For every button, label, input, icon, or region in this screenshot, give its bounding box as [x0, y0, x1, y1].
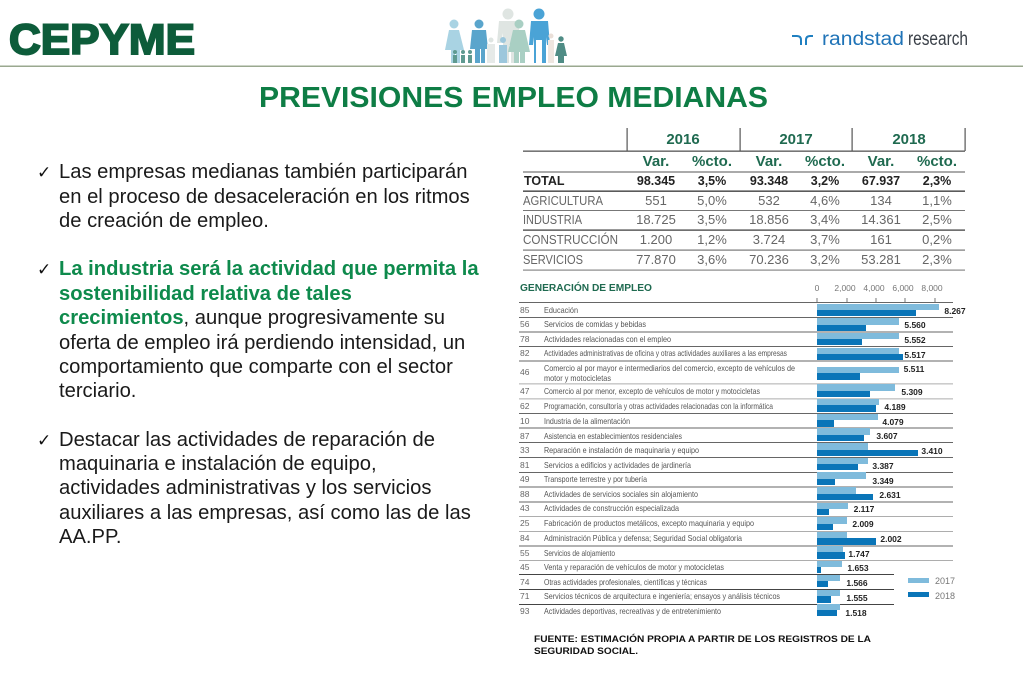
chart row codes: 81 [520, 460, 530, 470]
chart row labels: Fabricación de productos metálicos, excepto maquinaria y equipo [544, 518, 754, 528]
chart axis: 2,000 [834, 283, 856, 293]
table: forecasts 2016-2018: 98.345 [637, 174, 675, 188]
bullet 3: maquinaria e instalación de equipo, [59, 453, 377, 475]
chart row codes: 85 [520, 305, 530, 315]
logo: CEPYME: CEPYME [9, 16, 195, 64]
table: forecasts 2016-2018: %cto. [692, 153, 732, 170]
chart row labels [544, 305, 795, 616]
chart row codes: 78 [520, 334, 530, 344]
table: forecasts 2016-2018: Var. [756, 153, 782, 170]
table: forecasts 2016-2018: 14.361 [861, 212, 901, 227]
bullet 1: ✓ [37, 163, 51, 183]
table: forecasts 2016-2018: 70.236 [749, 252, 789, 267]
chart values [845, 306, 966, 618]
bullet 3: auxiliares a las empresas, así como las de las [59, 502, 471, 524]
table: forecasts 2016-2018: 3,4% [810, 212, 840, 227]
table: forecasts 2016-2018: 53.281 [861, 252, 901, 267]
icon: group of people [445, 8, 567, 63]
chart row codes: 43 [520, 503, 530, 513]
table: forecasts 2016-2018: 3,2% [810, 252, 840, 267]
chart row codes: 49 [520, 474, 530, 484]
chart row codes: 47 [520, 386, 530, 396]
chart row labels: Actividades administrativas de oficina y otras actividades auxiliares a las empresas [544, 348, 787, 358]
chart row codes: 33 [520, 445, 530, 455]
bars 2017 [817, 304, 939, 610]
bullet 1: en el proceso de desaceleración en los ritmos [59, 186, 470, 208]
chart row codes: 84 [520, 533, 530, 543]
logo: randstad research: research [908, 29, 968, 50]
table: forecasts 2016-2018: TOTAL [524, 174, 565, 188]
bullet 1: de creación de empleo. [59, 210, 269, 232]
chart row labels: Comercio al por mayor e intermediarios del comercio, excepto de vehículos de [544, 363, 795, 373]
chart values: 1.653 [847, 563, 869, 573]
chart row labels: motor y motocicletas [544, 373, 611, 383]
chart row labels: Servicios de comidas y bebidas [544, 319, 646, 329]
table: forecasts 2016-2018: INDUSTRIA [523, 212, 582, 227]
table: forecasts 2016-2018: 3,5% [698, 174, 726, 188]
bars 2018 [817, 310, 918, 616]
table: forecasts 2016-2018: 3,6% [697, 252, 727, 267]
table: forecasts 2016-2018: 4,6% [810, 193, 840, 208]
table: forecasts 2016-2018: SERVICIOS [523, 252, 583, 267]
chart row codes: 46 [520, 367, 530, 377]
chart axis [815, 283, 943, 302]
chart values: 5.309 [901, 387, 923, 397]
table: forecasts 2016-2018: 2,3% [923, 174, 951, 188]
chart values: 5.511 [904, 364, 925, 374]
chart values: 3.349 [872, 476, 894, 486]
table: forecasts 2016-2018: %cto. [917, 153, 957, 170]
source note: FUENTE: ESTIMACIÓN PROPIA A PARTIR DE LOS REGISTROS DE LA [534, 633, 871, 645]
chart row labels: Actividades deportivas, recreativas y de entretenimiento [544, 606, 721, 616]
chart row codes [520, 305, 530, 616]
table: forecasts 2016-2018: 0,2% [922, 232, 952, 247]
chart axis: 4,000 [863, 283, 885, 293]
table: forecasts 2016-2018 [523, 128, 966, 271]
source note: SEGURIDAD SOCIAL. [534, 646, 638, 657]
table: forecasts 2016-2018: 18.856 [749, 212, 789, 227]
chart row codes: 87 [520, 431, 530, 441]
bullet 3: ✓ [37, 431, 51, 451]
title: PREVISIONES EMPLEO MEDIANAS [259, 82, 768, 114]
chart row labels: Servicios técnicos de arquitectura e ingeniería; ensayos y análisis técnicos [544, 591, 780, 601]
chart values: 1.747 [848, 549, 870, 559]
table: forecasts 2016-2018: 1,2% [697, 232, 727, 247]
table: forecasts 2016-2018: CONSTRUCCIÓN [523, 232, 618, 247]
logo: randstad research: randstad [822, 29, 904, 50]
chart row codes: 74 [520, 577, 530, 587]
chart row labels: Industria de la alimentación [544, 416, 630, 426]
table: forecasts 2016-2018: 2018 [892, 131, 926, 148]
table: forecasts 2016-2018: 1,1% [922, 193, 952, 208]
bullet 1: Las empresas medianas también participarán [59, 161, 467, 183]
chart row codes: 25 [520, 518, 530, 528]
chart row codes: 10 [520, 416, 530, 426]
table: forecasts 2016-2018: 93.348 [750, 174, 788, 188]
chart values: 4.079 [882, 417, 904, 427]
chart axis: 6,000 [892, 283, 914, 293]
table: forecasts 2016-2018: 3.724 [753, 232, 785, 247]
chart legend: 2017 [935, 576, 955, 586]
chart row codes: 88 [520, 489, 530, 499]
chart row labels: Actividades relacionadas con el empleo [544, 334, 671, 344]
chart row codes: 45 [520, 562, 530, 572]
bullet 2: La industria será la actividad que permita la [59, 258, 479, 280]
table: forecasts 2016-2018: 2017 [779, 131, 813, 148]
chart values: 2.631 [879, 490, 901, 500]
bullet 3 [37, 429, 471, 548]
bullet 1 [37, 161, 470, 232]
chart row codes: 55 [520, 548, 530, 558]
table: forecasts 2016-2018: 77.870 [636, 252, 676, 267]
chart row codes: 82 [520, 348, 530, 358]
chart row labels: Transporte terrestre y por tubería [544, 474, 647, 484]
chart: generación de empleo [519, 281, 966, 618]
chart values: 3.410 [921, 446, 943, 456]
chart row codes: 62 [520, 401, 530, 411]
bullet 2 [37, 258, 479, 402]
chart values: 3.387 [872, 461, 894, 471]
logo: randstad research [792, 29, 968, 50]
chart values: 5.517 [904, 350, 926, 360]
chart values: 1.566 [846, 578, 868, 588]
bullet 3: actividades administrativas y los servicios [59, 477, 431, 499]
chart values: 4.189 [884, 402, 906, 412]
table: forecasts 2016-2018: Var. [643, 153, 669, 170]
chart values: 5.560 [904, 320, 926, 330]
chart row labels: Asistencia en establecimientos residenciales [544, 431, 682, 441]
chart values: 3.607 [876, 431, 898, 441]
table: forecasts 2016-2018: Var. [868, 153, 894, 170]
chart axis: 0 [815, 283, 820, 293]
table: forecasts 2016-2018: 5,0% [697, 193, 727, 208]
chart legend: 2018 [935, 591, 955, 601]
chart row labels: Administración Pública y defensa; Seguridad Social obligatoria [544, 533, 742, 543]
chart row labels: Programación, consultoría y otras actividades relacionadas con la informática [544, 401, 773, 411]
source note [534, 633, 871, 657]
table: forecasts 2016-2018: 2016 [666, 131, 700, 148]
table: forecasts 2016-2018: 18.725 [636, 212, 676, 227]
bullet 2: oferta de empleo irá perdiendo intensidad, un [59, 332, 465, 354]
chart row codes: 93 [520, 606, 530, 616]
chart row labels: Otras actividades profesionales, científicas y técnicas [544, 577, 707, 587]
table: forecasts 2016-2018: 2,5% [922, 212, 952, 227]
bullet 2: comportamiento que comparte con el sector [59, 356, 453, 378]
chart legend [908, 576, 955, 601]
bullet 2: crecimientos, aunque progresivamente su [59, 307, 445, 329]
header rule [0, 66, 1023, 67]
chart values: 2.009 [852, 519, 874, 529]
chart values: 1.555 [846, 593, 868, 603]
table: forecasts 2016-2018: AGRICULTURA [523, 193, 603, 208]
chart row labels: Actividades de construcción especializada [544, 503, 679, 513]
bullet 3: Destacar las actividades de reparación de [59, 429, 435, 451]
table: forecasts 2016-2018: 3,2% [811, 174, 839, 188]
table: forecasts 2016-2018: 532 [758, 193, 780, 208]
table: forecasts 2016-2018: 161 [870, 232, 892, 247]
chart values: 5.552 [904, 335, 926, 345]
chart row labels: Servicios de alojamiento [544, 548, 615, 558]
table: forecasts 2016-2018: 551 [645, 193, 667, 208]
table: forecasts 2016-2018: %cto. [805, 153, 845, 170]
chart values: 1.518 [845, 608, 867, 618]
chart row labels: Comercio al por menor, excepto de vehículos de motor y motocicletas [544, 386, 760, 396]
text block: bullet points [37, 161, 479, 548]
table: forecasts 2016-2018: 134 [870, 193, 892, 208]
table: forecasts 2016-2018: 1.200 [640, 232, 672, 247]
table: forecasts 2016-2018: 2,3% [922, 252, 952, 267]
chart values: 2.117 [854, 504, 875, 514]
chart row labels: Venta y reparación de vehículos de motor y motocicletas [544, 562, 724, 572]
table: forecasts 2016-2018: 3,5% [697, 212, 727, 227]
chart row codes: 71 [520, 591, 530, 601]
chart row labels: Actividades de servicios sociales sin alojamiento [544, 489, 698, 499]
chart row labels: Servicios a edificios y actividades de jardinería [544, 460, 691, 470]
chart values: 8.267 [944, 306, 966, 316]
chart row labels: Reparación e instalación de maquinaria y equipo [544, 445, 699, 455]
chart row labels: Educación [544, 305, 578, 315]
table: forecasts 2016-2018: 67.937 [862, 174, 900, 188]
chart heading: GENERACIÓN DE EMPLEO [520, 281, 652, 294]
bullet 3: AA.PP. [59, 526, 121, 548]
chart row codes: 56 [520, 319, 530, 329]
bullet 2: sostenibilidad relativa de tales [59, 283, 352, 305]
chart values: 2.002 [880, 534, 902, 544]
chart axis: 8,000 [921, 283, 943, 293]
bullet 2: terciario. [59, 380, 136, 402]
bullet 2: ✓ [37, 260, 51, 280]
table: forecasts 2016-2018: 3,7% [810, 232, 840, 247]
